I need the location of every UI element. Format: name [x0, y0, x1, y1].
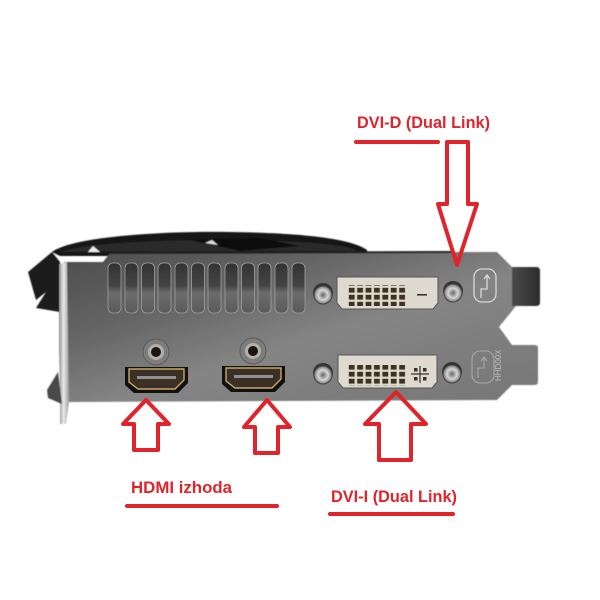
label: HDMI izhoda: HDMI izhoda — [131, 479, 233, 497]
audio jack right — [240, 338, 266, 364]
arrow: HDMI left — [123, 400, 169, 450]
underline: DVI-I — [328, 512, 455, 516]
arrow: DVI-D — [438, 142, 477, 265]
HDMI port right — [222, 366, 285, 392]
label: DVI-D (Dual Link): DVI-D (Dual Link) — [357, 114, 490, 132]
metal bracket plate — [47, 252, 540, 424]
label: DVI-I (Dual Link): DVI-I (Dual Link) — [331, 488, 457, 506]
audio jack left — [143, 339, 169, 365]
HDMI port left — [125, 367, 188, 393]
bracket emblem lower — [472, 351, 494, 383]
underline: HDMI — [125, 504, 279, 508]
underline: DVI-D — [354, 140, 440, 144]
arrow: HDMI right — [244, 400, 290, 453]
dark upper tab — [512, 267, 540, 306]
silver side edge — [59, 262, 69, 424]
fan shroud — [28, 232, 367, 312]
ventilation slots — [108, 263, 305, 313]
bracket emblem upper — [474, 269, 496, 302]
bracket model text: HHD00X — [494, 349, 503, 381]
DVI-I port — [313, 355, 462, 388]
arrow: DVI-I — [365, 392, 426, 460]
DVI-D port — [313, 277, 463, 309]
